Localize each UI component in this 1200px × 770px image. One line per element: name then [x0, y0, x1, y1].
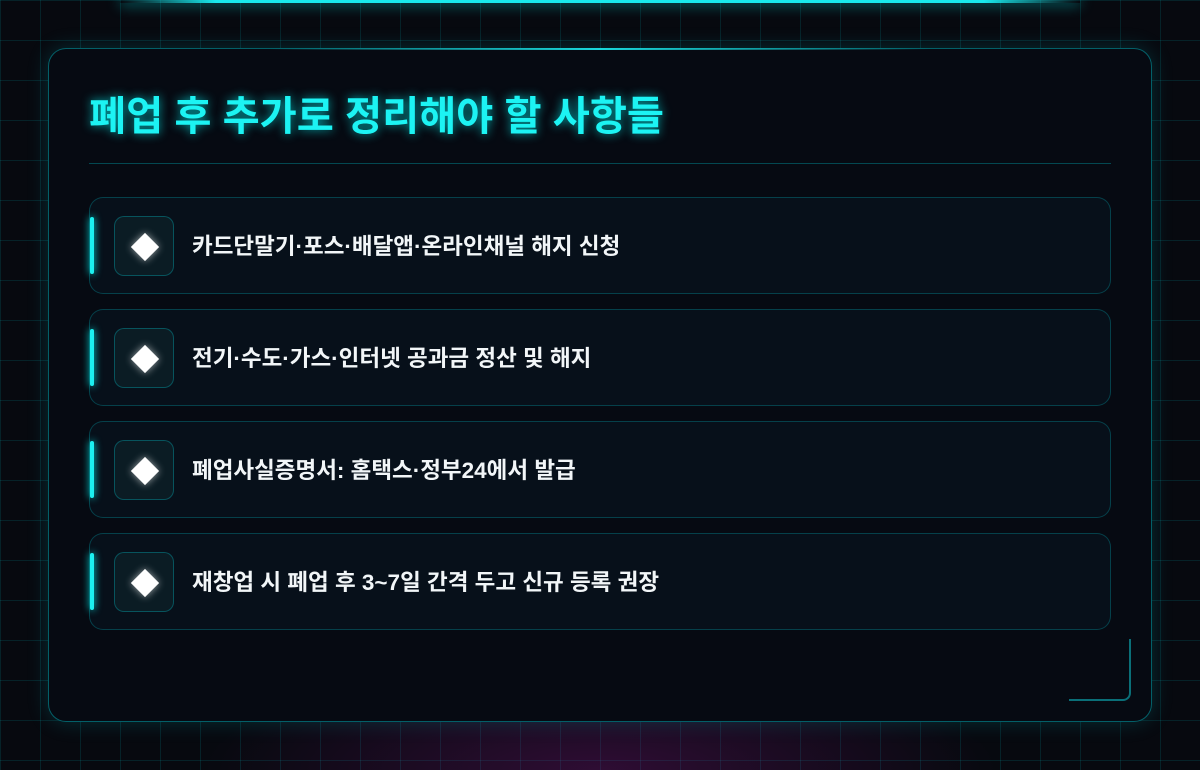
corner bracket	[1069, 639, 1131, 701]
text 4: 재창업 시 폐업 후 3~7일 간격 두고 신규 등록 권장	[192, 570, 659, 595]
text 2: 전기·수도·가스·인터넷 공과금 정산 및 해지	[192, 346, 591, 371]
icon: diamond	[114, 440, 174, 500]
item 2	[89, 309, 1111, 406]
text 3: 폐업사실증명서: 홈택스·정부24에서 발급	[192, 458, 576, 483]
icon: diamond	[114, 328, 174, 388]
icon: diamond	[114, 216, 174, 276]
icon: diamond	[114, 552, 174, 612]
text 1: 카드단말기·포스·배달앱·온라인채널 해지 신청	[192, 234, 620, 259]
item 4	[89, 533, 1111, 630]
item 1	[89, 197, 1111, 294]
item 3	[89, 421, 1111, 518]
title: 폐업 후 추가로 정리해야 할 사항들	[89, 94, 664, 139]
